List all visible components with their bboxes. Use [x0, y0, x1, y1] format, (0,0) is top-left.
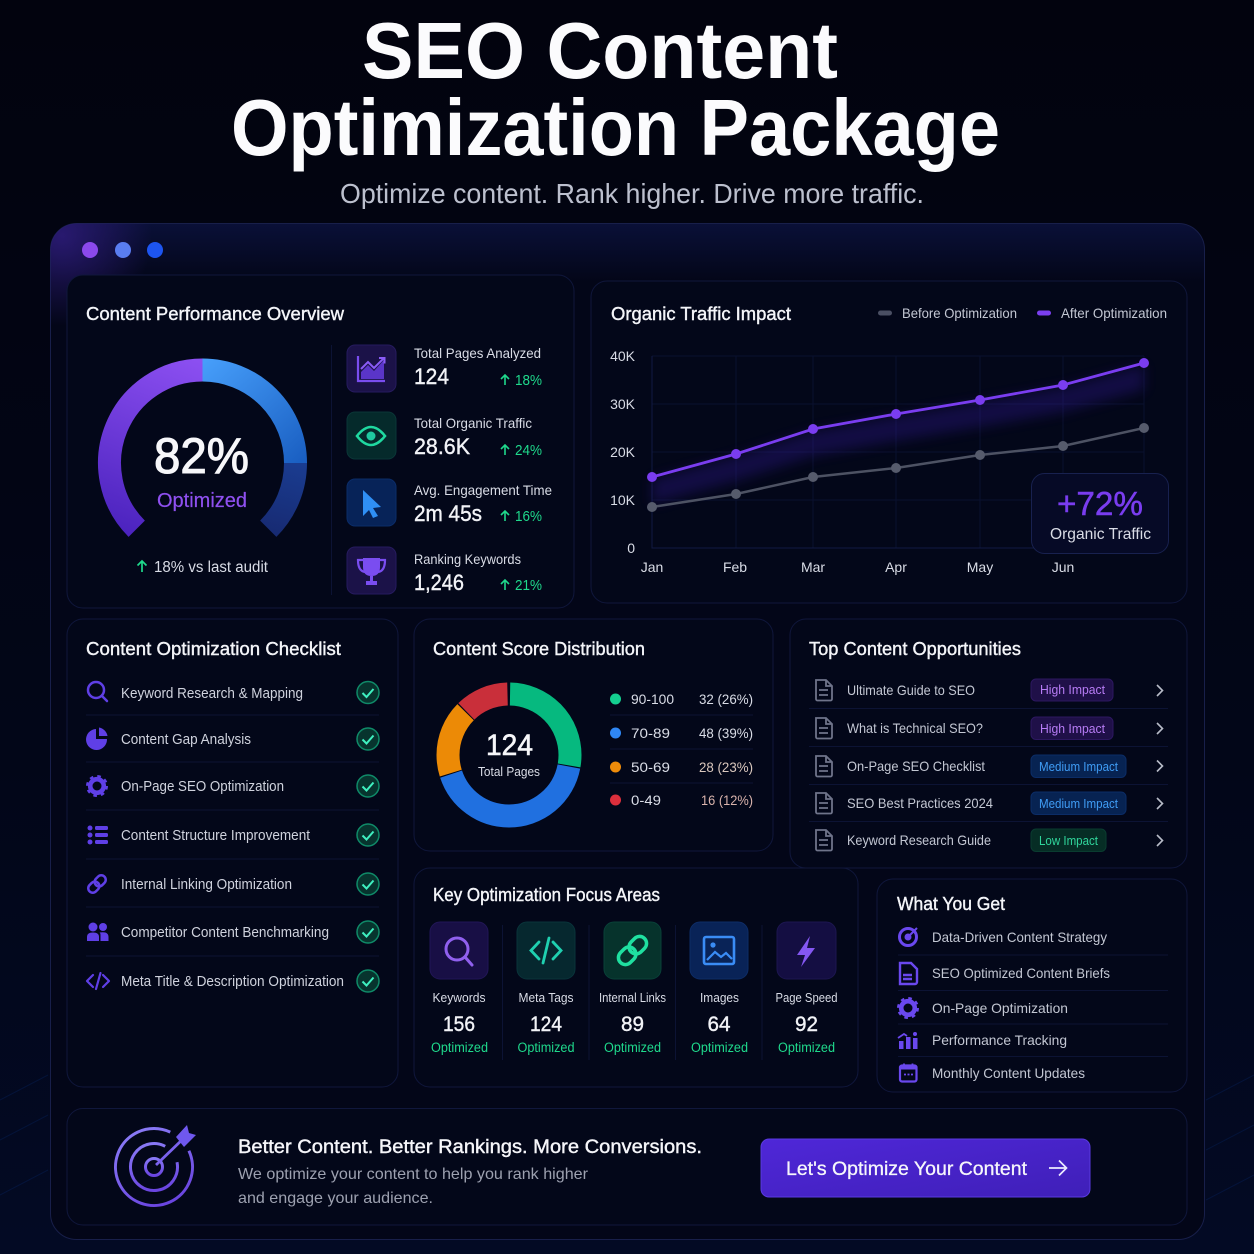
- focus: page speed: Optimized: [778, 1040, 835, 1055]
- x axis labels: [641, 559, 1074, 575]
- icon: eye: [347, 412, 396, 459]
- panel: call to action: [67, 1108, 1187, 1225]
- legend table: 50-69: [631, 759, 670, 775]
- item: data-driven strategy: Data-Driven Content Strategy: [932, 929, 1107, 945]
- icon: growth chart: [347, 345, 396, 392]
- legend table: [610, 691, 753, 808]
- panel: what you get: [877, 879, 1187, 1092]
- stat: total organic traffic: Total Organic Traffic: [414, 415, 532, 431]
- icon: document: [816, 756, 832, 776]
- y axis labels: [610, 348, 636, 556]
- icon: users: [87, 922, 108, 941]
- item: meta title: Meta Title & Description Optimization: [121, 974, 344, 990]
- legend table: 70-89: [631, 725, 670, 741]
- badge: medium impact: Medium Impact: [1039, 760, 1118, 774]
- gauge chart: [110, 370, 296, 529]
- callout: +72% organic traffic: +72%: [1057, 485, 1143, 522]
- panel: content optimization checklist: [67, 619, 398, 1087]
- row: on-page checklist: [816, 755, 1162, 778]
- check: [357, 824, 379, 846]
- icon: document: [816, 793, 832, 814]
- button: [761, 1139, 1090, 1197]
- focus: meta tags: [517, 922, 575, 1055]
- gauge label: Optimized: [157, 490, 247, 512]
- line chart: [610, 348, 1149, 575]
- item: on-page seo optimization: [88, 775, 379, 797]
- stat: avg engagement time: [347, 479, 552, 526]
- check: [357, 728, 379, 750]
- stat: total organic traffic: 24%: [515, 442, 542, 459]
- icon: calendar: [900, 1064, 916, 1082]
- y axis labels: 30K: [610, 396, 636, 412]
- donut chart: [448, 694, 570, 816]
- title: SEO Content: [362, 6, 838, 95]
- focus: images: [690, 922, 748, 1055]
- item: content gap analysis: Content Gap Analysis: [121, 732, 251, 748]
- badge: high impact: High Impact: [1040, 683, 1106, 697]
- icon: code: [87, 973, 109, 989]
- heading: Content Optimization Checklist: [86, 638, 341, 659]
- background streaks: [0, 1075, 1254, 1200]
- check: [357, 682, 379, 704]
- x axis labels: Apr: [885, 559, 907, 575]
- focus: keywords: 156: [443, 1013, 475, 1036]
- badge: low impact: Low Impact: [1039, 834, 1098, 848]
- legend table: 16 (12%): [701, 792, 753, 808]
- title: [231, 6, 1000, 172]
- row: technical seo: What is Technical SEO?: [847, 720, 983, 736]
- item: monthly updates: Monthly Content Updates: [932, 1065, 1085, 1081]
- item: content structure: [88, 824, 379, 846]
- icon: list: [88, 826, 108, 844]
- icon: gear: [898, 998, 918, 1018]
- legend: After Optimization: [1061, 305, 1167, 321]
- dashboard window: [50, 224, 1204, 1240]
- series: after optimization: [647, 358, 1149, 482]
- x axis labels: Feb: [723, 559, 747, 575]
- focus: internal links: Optimized: [604, 1040, 661, 1055]
- x axis labels: Jun: [1052, 559, 1074, 575]
- icon: cursor: [347, 479, 396, 526]
- icon: pie chart: [86, 728, 108, 750]
- focus: page speed: 92: [795, 1013, 818, 1036]
- focus: internal links: Internal Links: [599, 991, 666, 1005]
- stat: ranking keywords: 1,246: [414, 570, 464, 595]
- stat: avg engagement time: 2m 45s: [414, 501, 482, 526]
- legend table: 28 (23%): [699, 759, 753, 775]
- icon: target: [900, 928, 917, 946]
- item: content structure: Content Structure Improvement: [121, 828, 310, 844]
- focus: meta tags: Optimized: [518, 1040, 574, 1055]
- panel: content score distribution: [414, 619, 773, 851]
- badge: high impact: High Impact: [1040, 722, 1106, 736]
- check: [357, 970, 379, 992]
- item: competitor benchmarking: [87, 921, 379, 943]
- heading: Key Optimization Focus Areas: [433, 884, 660, 905]
- stat: ranking keywords: 21%: [515, 577, 542, 594]
- legend table: 90-100: [631, 691, 674, 707]
- item: meta title: [87, 970, 379, 992]
- badge: medium impact: [1031, 792, 1126, 814]
- badge: high impact: [1031, 717, 1113, 740]
- item: internal linking: [86, 873, 379, 895]
- donut center value: 124: [486, 729, 533, 762]
- focus: keywords: Keywords: [432, 991, 486, 1005]
- panel: key optimization focus areas: [414, 868, 858, 1087]
- button: Let's Optimize Your Content: [786, 1158, 1028, 1180]
- stat: ranking keywords: Ranking Keywords: [414, 551, 521, 567]
- stat: total pages analyzed: 18%: [515, 372, 542, 389]
- icon: document: [900, 963, 917, 984]
- heading: Content Score Distribution: [433, 638, 645, 659]
- badge: medium impact: [1031, 755, 1126, 778]
- description: [238, 1166, 589, 1207]
- y axis labels: 40K: [610, 348, 636, 364]
- callout: +72% organic traffic: Organic Traffic: [1050, 526, 1151, 543]
- row: keyword research guide: Keyword Research Guide: [847, 832, 991, 848]
- heading: Top Content Opportunities: [809, 638, 1021, 659]
- row: best practices: [816, 792, 1162, 814]
- check: [357, 775, 379, 797]
- series: before optimization: [647, 423, 1149, 512]
- focus: keywords: [430, 922, 488, 1055]
- focus: images: 64: [708, 1013, 731, 1036]
- icon: trophy: [347, 547, 396, 594]
- row: keyword research guide: [816, 829, 1162, 852]
- gauge value: 82%: [154, 428, 249, 484]
- gauge delta: 18% vs last audit: [154, 559, 269, 576]
- stat: total organic traffic: 28.6K: [414, 434, 470, 459]
- icon: document: [816, 680, 832, 700]
- badge: medium impact: Medium Impact: [1039, 797, 1118, 811]
- stat: total pages analyzed: 124: [414, 364, 449, 389]
- badge: high impact: [1031, 679, 1113, 701]
- icon: image: [690, 922, 748, 979]
- focus: page speed: [776, 922, 838, 1055]
- heading: What You Get: [897, 893, 1005, 914]
- focus: internal links: [599, 922, 666, 1055]
- icon: document: [816, 718, 832, 738]
- focus: images: Optimized: [691, 1040, 748, 1055]
- icon: gear: [88, 776, 106, 796]
- item: competitor benchmarking: Competitor Content Benchmarking: [121, 925, 329, 941]
- focus: internal links: 89: [621, 1013, 644, 1036]
- description: We optimize your content to help you rank higher: [238, 1166, 589, 1183]
- icon: document: [816, 830, 832, 850]
- y axis labels: 0: [627, 540, 635, 556]
- panel: content performance overview: [67, 275, 574, 608]
- focus: page speed: Page Speed: [776, 991, 838, 1005]
- legend table: 0-49: [631, 792, 661, 808]
- x axis labels: Mar: [801, 559, 825, 575]
- item: seo briefs: [900, 963, 1110, 984]
- item: internal linking: Internal Linking Optimization: [121, 877, 292, 893]
- icon: code: [517, 922, 575, 979]
- item: performance tracking: Performance Tracking: [932, 1032, 1067, 1048]
- row: ultimate guide: [816, 679, 1162, 701]
- focus: keywords: Optimized: [431, 1040, 488, 1055]
- description: and engage your audience.: [238, 1190, 433, 1207]
- item: keyword research: [88, 682, 379, 704]
- legend: [878, 305, 1167, 321]
- stat: total organic traffic: [347, 412, 542, 459]
- icon: bars: [898, 1032, 918, 1049]
- y axis labels: 10K: [610, 492, 636, 508]
- legend table: 48 (39%): [699, 725, 753, 741]
- legend table: 32 (26%): [699, 691, 753, 707]
- stat: total pages analyzed: [347, 345, 542, 392]
- badge: low impact: [1031, 829, 1106, 852]
- item: on-page seo optimization: On-Page SEO Optimization: [121, 779, 284, 795]
- headline: Better Content. Better Rankings. More Conversions.: [238, 1136, 702, 1158]
- stat: ranking keywords: [347, 547, 542, 595]
- x axis labels: Jan: [641, 559, 663, 575]
- title: Optimization Package: [231, 83, 1000, 172]
- check: [357, 873, 379, 895]
- item: content gap analysis: [86, 728, 379, 750]
- callout: +72% organic traffic: [1032, 474, 1168, 554]
- panel: top content opportunities: [790, 619, 1187, 868]
- window dots: [82, 242, 163, 258]
- focus: images: Images: [700, 991, 739, 1005]
- item: on-page optimization: [898, 998, 1068, 1018]
- stat: avg engagement time: Avg. Engagement Time: [414, 482, 552, 498]
- icon: link: [604, 922, 661, 979]
- row: on-page checklist: On-Page SEO Checklist: [847, 758, 985, 774]
- stat: total pages analyzed: Total Pages Analyzed: [414, 345, 541, 361]
- heading: Content Performance Overview: [86, 303, 345, 324]
- focus: meta tags: Meta Tags: [518, 991, 574, 1005]
- icon: lightning: [777, 922, 836, 979]
- arrow: [1049, 1160, 1066, 1176]
- row: best practices: SEO Best Practices 2024: [847, 795, 993, 811]
- icon: target with arrow: [103, 1116, 205, 1218]
- row: ultimate guide: Ultimate Guide to SEO: [847, 682, 975, 698]
- panel: organic traffic impact: [591, 281, 1187, 603]
- icon: link: [86, 873, 108, 895]
- item: seo briefs: SEO Optimized Content Briefs: [932, 965, 1110, 981]
- icon: magnifier: [88, 682, 107, 701]
- item: on-page optimization: On-Page Optimization: [932, 1000, 1068, 1016]
- x axis labels: May: [967, 559, 993, 575]
- subtitle: Optimize content. Rank higher. Drive more traffic.: [340, 178, 924, 209]
- y axis labels: 20K: [610, 444, 636, 460]
- heading: Organic Traffic Impact: [611, 303, 791, 324]
- row: technical seo: [816, 717, 1162, 740]
- legend: Before Optimization: [902, 305, 1017, 321]
- stat: avg engagement time: 16%: [515, 508, 542, 525]
- donut center label: Total Pages: [478, 765, 540, 779]
- item: keyword research: Keyword Research & Mapping: [121, 686, 303, 702]
- icon: magnifier: [430, 922, 488, 979]
- check: [357, 921, 379, 943]
- focus: meta tags: 124: [530, 1013, 562, 1036]
